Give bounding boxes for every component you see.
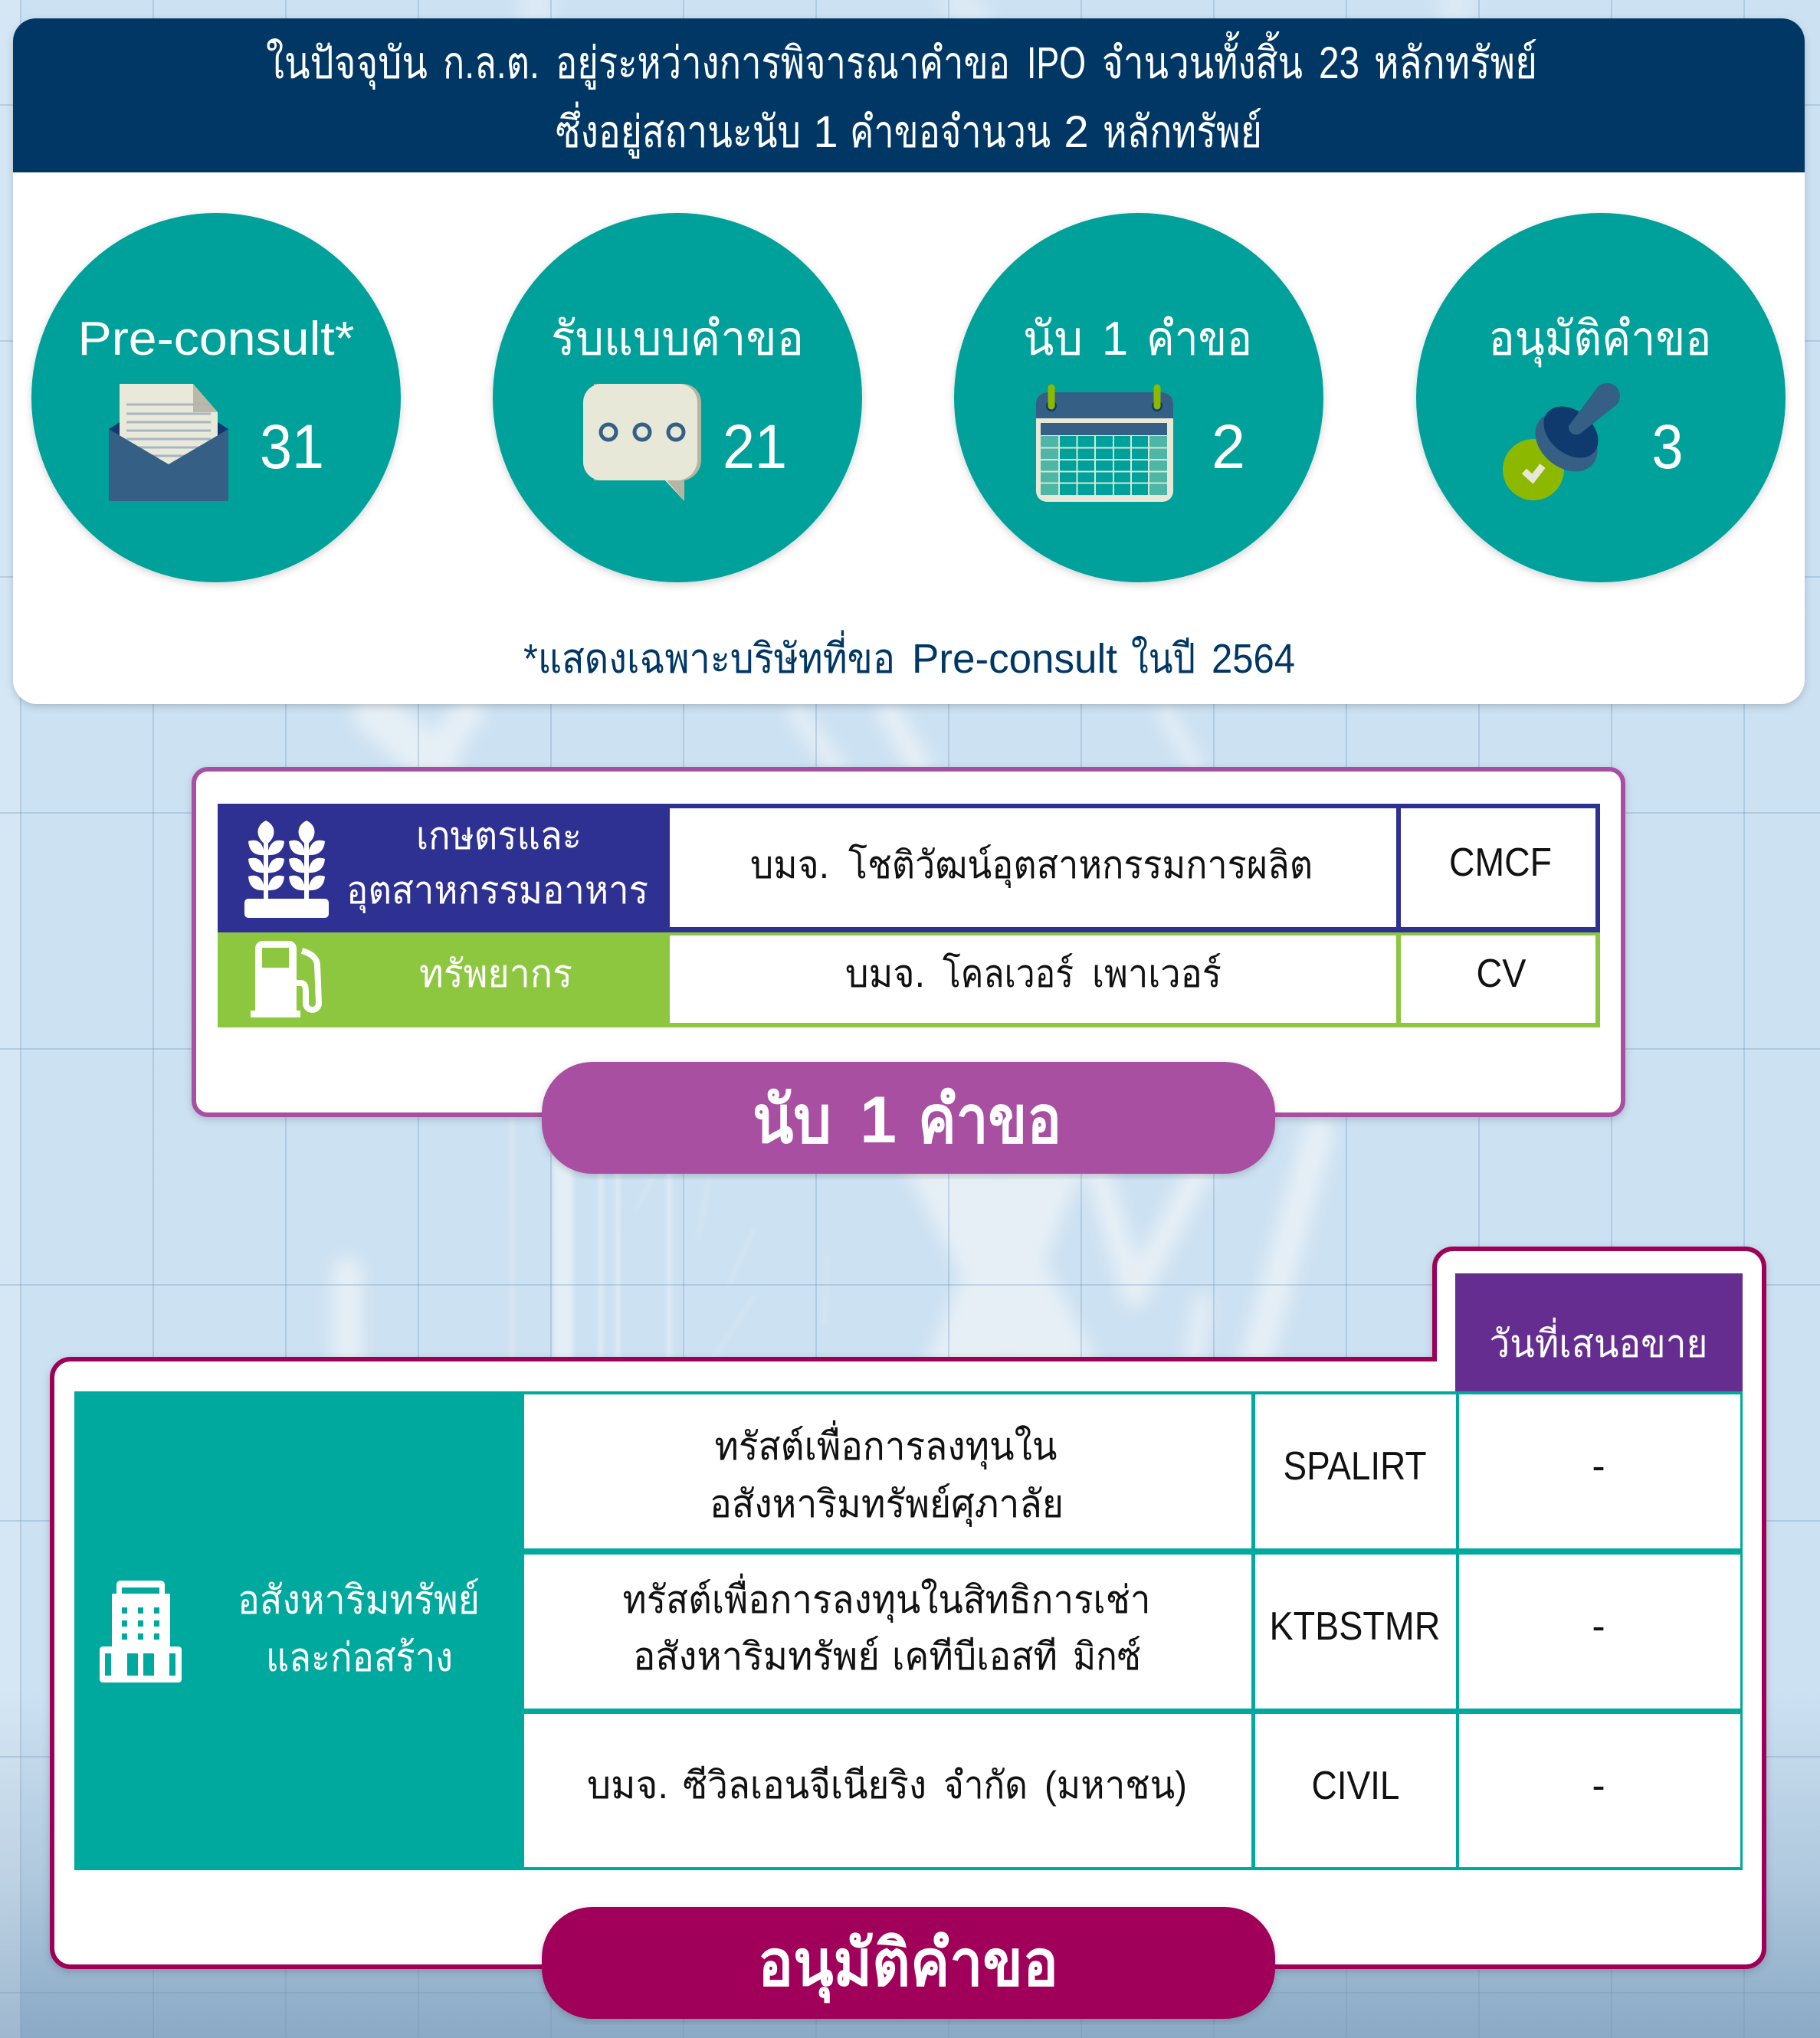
heading: หลักทรัพย์ (1103, 107, 1262, 157)
panel: approved (52, 1249, 1764, 2019)
status pill: อนุมัติคำขอ (758, 1927, 1058, 2004)
heading (266, 31, 1537, 159)
row: CIVIL: ซีวิลเอนจีเนียริง (683, 1764, 926, 1807)
footnote: Pre-consult (912, 636, 1117, 682)
status pill: คำขอ (918, 1083, 1061, 1157)
status pill: 1 (860, 1083, 897, 1157)
ticker: CMCF (1449, 840, 1552, 885)
stat: approved (1416, 213, 1786, 582)
company name (845, 952, 1222, 995)
icon: building (100, 1581, 182, 1682)
row: KTBSTMR: มิกซ์ (1073, 1635, 1141, 1678)
category label: เกษตรและ (416, 814, 582, 857)
stat: Pre-consult: Pre-consult* (78, 313, 354, 365)
heading: 2 (1064, 107, 1089, 157)
row: CIVIL: (มหาชน) (1044, 1764, 1187, 1807)
row: SPALIRT: ทรัสต์เพื่อการลงทุนใน (714, 1420, 1058, 1470)
heading: จำนวนทั้งสิ้น (1102, 31, 1303, 88)
icon: stamp (1503, 383, 1620, 500)
stat: filing received: 21 (723, 412, 787, 482)
heading: อยู่ระหว่างการพิจารณาคำขอ (556, 38, 1010, 90)
company name: บมจ. (845, 952, 925, 995)
category label (346, 814, 648, 913)
row: KTBSTMR (622, 1574, 1605, 1678)
status pill (542, 1907, 1275, 2019)
heading: ก.ล.ต. (443, 38, 539, 88)
table row: resources (218, 932, 1600, 1027)
ticker: CV (1476, 952, 1527, 996)
table: real estate and construction (74, 1391, 1743, 1870)
stat: day one filing (954, 213, 1323, 582)
stat: approved: 3 (1652, 412, 1683, 482)
row: KTBSTMR: - (1592, 1604, 1605, 1649)
row: CIVIL: บมจ. (587, 1764, 668, 1807)
stat: day one filing: 2 (1212, 412, 1245, 482)
stat: filing received: รับแบบคำขอ (551, 313, 804, 365)
heading: IPO (1027, 38, 1086, 88)
panel: day one filing (194, 769, 1623, 1174)
row: SPALIRT: - (1592, 1444, 1605, 1489)
footnote: *แสดงเฉพาะบริษัทที่ขอ (523, 630, 895, 682)
heading: ซึ่งอยู่สถานะนับ (556, 101, 801, 159)
stat: day one filing: นับ (1023, 313, 1083, 365)
table row: agro and food (218, 804, 1600, 932)
footnote: ในปี (1131, 635, 1195, 682)
heading: คำขอจำนวน (850, 107, 1051, 157)
icon: speech bubble (583, 384, 701, 501)
category label: ทรัพยากร (419, 952, 572, 995)
stat: Pre-consult (31, 213, 401, 582)
category label: อสังหาริมทรัพย์ (238, 1578, 480, 1623)
stat: Pre-consult: 31 (260, 412, 324, 482)
status pill: นับ (753, 1083, 831, 1157)
stat: day one filing: 1 (1102, 313, 1128, 365)
icon: envelope (109, 384, 228, 501)
row: KTBSTMR: ทรัสต์เพื่อการลงทุนในสิทธิการเช่า (622, 1574, 1151, 1623)
row: SPALIRT: อสังหาริมทรัพย์ศุภาลัย (710, 1483, 1064, 1527)
row: KTBSTMR: เคทีบีเอสที (892, 1635, 1058, 1678)
footnote: 2564 (1212, 636, 1295, 682)
header band (13, 18, 1805, 172)
row: KTBSTMR: KTBSTMR (1269, 1604, 1441, 1649)
footnote (523, 630, 1295, 682)
stat: filing received (493, 213, 862, 582)
row: CIVIL: - (1592, 1764, 1605, 1808)
icon: calendar (1036, 388, 1173, 502)
stat: day one filing: คำขอ (1146, 313, 1252, 365)
stat: approved: อนุมัติคำขอ (1488, 313, 1712, 367)
column header: offering date (1455, 1273, 1743, 1391)
row: CIVIL (587, 1764, 1605, 1808)
company name: โคลเวอร์ (943, 952, 1074, 995)
column header: offering date: วันที่เสนอขาย (1490, 1318, 1707, 1365)
row: KTBSTMR: อสังหาริมทรัพย์ (633, 1635, 880, 1678)
category label: และก่อสร้าง (266, 1636, 453, 1680)
company name: บมจ. (750, 844, 829, 886)
row: SPALIRT: SPALIRT (1283, 1444, 1427, 1489)
icon: fuel pump (251, 941, 319, 1017)
row: CIVIL: CIVIL (1312, 1764, 1399, 1808)
category label (238, 1578, 480, 1680)
company name: เพาเวอร์ (1092, 952, 1222, 995)
row: SPALIRT (710, 1420, 1605, 1527)
row: CIVIL: จำกัด (943, 1764, 1028, 1807)
panel: IPO summary (13, 18, 1805, 704)
category label: อุตสาหกรรมอาหาร (346, 869, 648, 913)
heading: 1 (813, 107, 838, 157)
heading: 23 (1319, 38, 1359, 88)
icon: wheat (244, 821, 329, 918)
status pill (542, 1062, 1275, 1174)
heading: หลักทรัพย์ (1374, 38, 1537, 88)
heading: ในปัจจุบัน (266, 38, 428, 90)
company name: โชติวัฒน์อุตสาหกรรมการผลิต (848, 844, 1313, 888)
